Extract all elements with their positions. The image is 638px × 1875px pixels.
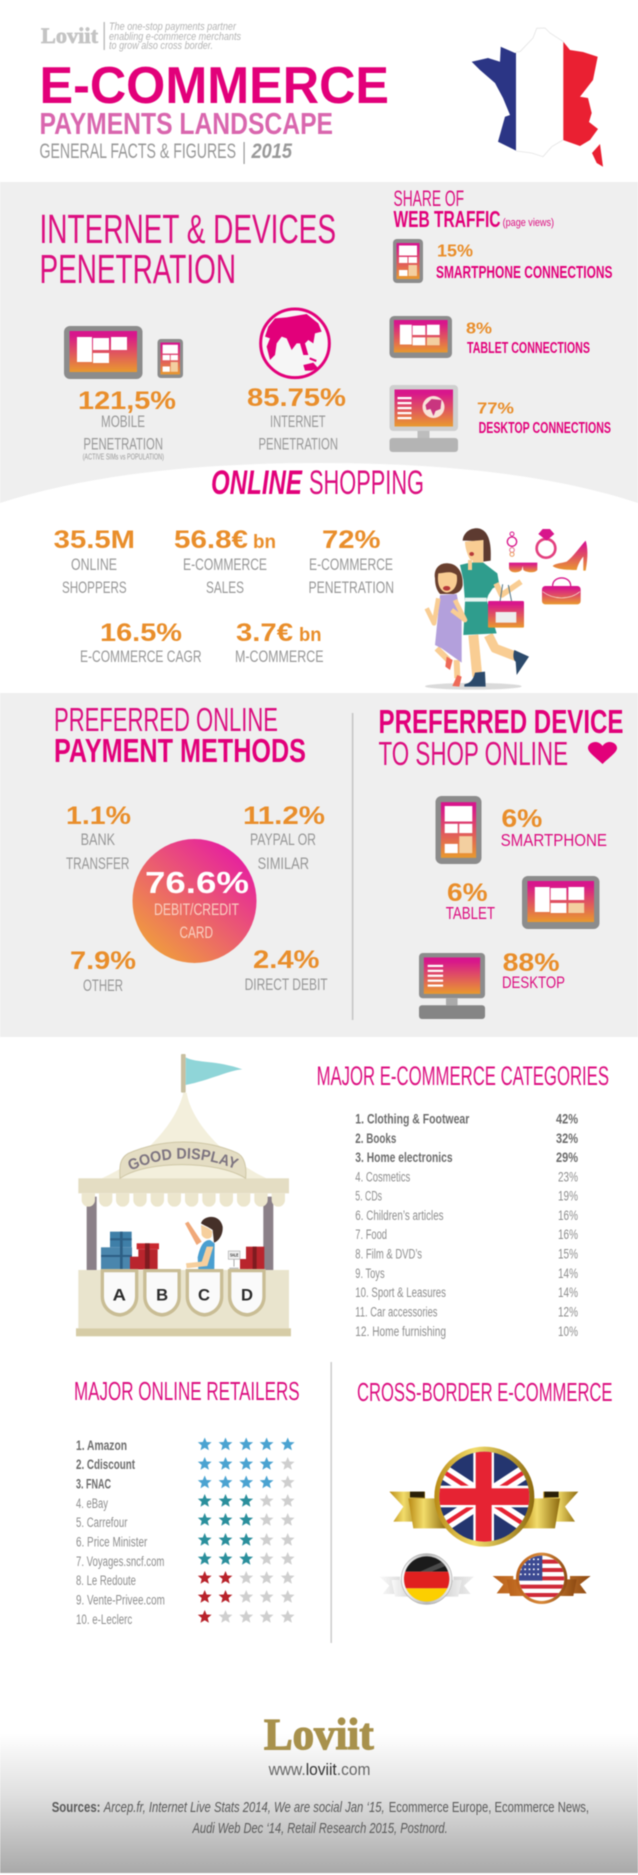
sale sign [228,1251,240,1268]
category percentages: 23% [558,1170,578,1184]
badge: United Kingdom [389,1447,578,1547]
sources: Audi Web Dec ‘14, Retail Research 2015, Postnord. [192,1820,448,1837]
retailer names: 7. Voyages.sncf.com [76,1554,164,1569]
stat: mobile penetration: MOBILE [101,412,145,431]
category percentages: 16% [558,1227,578,1242]
retailer names: 8. Le Redoute [76,1573,136,1588]
heading: PAYMENT METHODS [54,732,306,769]
stat: internet penetration: 85.75% [247,384,346,412]
panel: payment methods and preferred device background [0,693,638,1037]
panel: internet and devices penetration [40,186,612,462]
retailer names: 2. Cdiscount [76,1457,135,1472]
stat: internet penetration: INTERNET [270,412,326,431]
posts [87,1197,273,1271]
category names: 6. Children’s articles [355,1208,444,1223]
stat: mobile penetration: (ACTIVE SIMs vs POPULATION) [83,452,164,462]
category percentages: 29% [556,1150,578,1165]
panel: online shopping [54,464,587,690]
panel: online shopping background [0,463,638,693]
panel: cross-border e-commerce [357,1377,612,1604]
icon: smartphone connections [393,239,423,283]
scallops [82,1193,285,1207]
category names: 8. Film & DVD’s [355,1246,422,1262]
retailer names: 1. Amazon [76,1438,127,1453]
subheading with year: 2015 [251,140,292,163]
stat: paypal or similar: 11.2% [243,802,325,830]
heading [40,206,336,292]
stat: desktop connections: 77% [477,400,514,418]
stat: debit/credit card circle: 76.6% [145,865,249,900]
stat: paypal or similar: PAYPAL OR [250,830,316,849]
tent roof [102,1093,267,1178]
category percentages: 10% [558,1324,578,1339]
stat: desktop [502,949,565,992]
stat: smartphone: SMARTPHONE [501,830,607,850]
heading: INTERNET & DEVICES [40,206,336,252]
shields with letters: C [198,1286,210,1305]
icon: heart [588,742,617,764]
stat: e-commerce CAGR [80,619,202,666]
stat: e-commerce CAGR: E-COMMERCE CAGR [80,647,202,666]
category names: 11. Car accessories [355,1304,438,1320]
star ratings [198,1438,295,1623]
icon: watch [507,532,517,556]
category names: 1. Clothing & Footwear [355,1112,470,1126]
sign: good display: GOOD DISPLAY [128,1148,240,1170]
stat: online shoppers: SHOPPERS [62,578,127,597]
icon: tablet connections [390,316,452,358]
icon: handbag [542,578,581,604]
heading: PENETRATION [40,246,236,292]
retailer names: 6. Price Minister [76,1534,148,1550]
icon: ring [537,529,555,558]
grey band background [0,182,638,512]
stat: paypal or similar: SIMILAR [258,854,309,873]
stat: direct debit: DIRECT DEBIT [245,975,328,994]
stat: e-commerce penetration: 72% [322,526,380,554]
icon: desktop connections [390,385,458,452]
stat: direct debit [245,946,328,994]
icon: high heel shoe [553,541,587,571]
heading [211,464,424,502]
heading [378,703,624,772]
icon: desktop [419,953,485,1019]
logo: Loviit small: Loviit [41,23,99,48]
panel: preferred online payment methods [54,701,328,995]
panel: footer [52,1710,589,1837]
stat: e-commerce sales [174,526,276,597]
shields with letters: D [241,1286,253,1305]
logo: Loviit: Loviit [264,1710,374,1759]
category names: 7. Food [355,1227,387,1242]
stat: mobile penetration: 121,5% [78,387,176,415]
tagline: to grow also cross border. [109,40,213,52]
divider between payment and device [352,713,353,1020]
category names: 5. CDs [355,1188,382,1204]
stat: m-commerce: 3.7€ [236,619,293,647]
retailer names [76,1438,165,1627]
category percentages: 16% [558,1208,578,1223]
stat: smartphone connections: 15% [437,240,473,260]
category percentages: 32% [556,1131,578,1146]
stat: debit/credit card circle: DEBIT/CREDIT [154,900,239,919]
badge: Germany [379,1554,474,1604]
counter base [76,1328,291,1336]
category names: 9. Toys [355,1266,385,1281]
stat: online shoppers [54,526,135,597]
stat: direct debit: 2.4% [253,946,320,974]
category names [355,1112,470,1339]
stat: e-commerce sales: E-COMMERCE [183,555,267,574]
category percentages: 14% [558,1285,578,1300]
stat: other: OTHER [83,976,123,995]
sale sign: SALE [230,1253,238,1258]
sign: good display [118,1141,247,1179]
stat: debit/credit card circle [132,839,256,963]
stat: internet penetration [247,384,346,454]
panel: major e-commerce categories [317,1061,609,1339]
stat: smartphone: 6% [501,805,542,833]
stat: e-commerce penetration [308,526,394,597]
icon: tablet [522,876,599,929]
stat: tablet connections: 8% [466,320,492,338]
stat: tablet connections [466,320,590,357]
stat: e-commerce CAGR: 16.5% [100,619,182,647]
stat: smartphone connections [436,240,612,282]
retailer names: 4. eBay [76,1496,108,1511]
icon: tablet [64,326,142,379]
illustration: market stall [76,1054,292,1337]
category names: 3. Home electronics [355,1150,453,1165]
stat: bank transfer: BANK [81,830,115,849]
roof bar [78,1178,289,1193]
badge: United States [493,1553,591,1604]
heading: share of web traffic: SHARE OF [394,186,464,211]
sources [52,1799,589,1837]
stat: m-commerce: bn [299,625,322,646]
stat: other: 7.9% [70,947,136,975]
stat: e-commerce sales: 56.8€ [174,526,248,554]
subtitle: PAYMENTS LANDSCAPE [40,106,333,141]
heading: ONLINE [211,464,303,502]
panel: preferred device to shop online [378,703,624,1019]
stat: other [70,947,136,995]
stat: e-commerce penetration: PENETRATION [308,578,394,597]
icon: phone [158,339,183,378]
heading: share of web traffic: (page views) [503,217,554,229]
stat: m-commerce: M-COMMERCE [235,647,324,666]
blue gift boxes [101,1232,132,1269]
category percentages [556,1112,578,1339]
subheading with year: GENERAL FACTS & FIGURES [40,140,236,163]
category names: 12. Home furnishing [355,1324,446,1339]
stat: tablet: 6% [447,879,488,907]
tagline: enabling e-commerce merchants [109,31,241,43]
badges [379,1447,591,1604]
shields with letters: B [156,1286,168,1305]
heading: MAJOR ONLINE RETAILERS [74,1376,300,1406]
stat: debit/credit card circle: CARD [180,923,213,942]
category percentages: 14% [558,1266,578,1281]
tagline: The one-stop payments partner [109,21,237,33]
icon: sunglasses [509,563,537,572]
stat: tablet: TABLET [446,903,495,923]
flag [181,1054,242,1093]
stat: e-commerce penetration: E-COMMERCE [309,555,393,574]
shields with letters: A [113,1286,126,1305]
stat: e-commerce sales: bn [253,532,276,553]
stat: online shoppers: 35.5M [54,526,135,554]
category percentages: 42% [556,1112,578,1126]
stat: tablet [446,879,495,923]
category names: 4. Cosmetics [355,1170,410,1184]
sources: Arcep.fr, Internet Live Stats 2014, We are social Jan ‘15, [103,1799,385,1816]
sources: Sources: [52,1799,100,1816]
stat: mobile penetration [78,387,176,462]
heading: SHOPPING [309,464,424,502]
retailer names: 5. Carrefour [76,1515,128,1530]
stat: online shoppers: ONLINE [71,555,117,574]
stat: m-commerce [235,619,324,666]
footer gradient background [0,1733,638,1873]
shopkeeper [185,1217,223,1269]
red gift boxes [130,1243,264,1269]
retailer names: 3. FNAC [76,1476,111,1492]
counter [78,1270,289,1328]
shields with letters [101,1269,266,1317]
heading [54,701,306,769]
category names: 10. Sport & Leasures [355,1285,446,1300]
stat: mobile penetration: PENETRATION [83,434,163,454]
panel: header [40,20,608,175]
stat: bank transfer: TRANSFER [66,854,129,873]
heading: PREFERRED ONLINE [54,701,278,738]
icon: map of France in flag colours [471,28,604,168]
stat: paypal or similar [243,802,325,873]
illustration: mother and daughter shopping [425,528,587,690]
stat: smartphone [501,805,607,850]
category percentages: 12% [558,1304,578,1320]
stat: desktop: 88% [503,949,560,977]
icon: smartphone [436,796,481,864]
stat: desktop: DESKTOP [502,973,565,992]
stat: internet penetration: PENETRATION [258,434,338,454]
website: www.loviit.com [268,1760,370,1779]
tagline [109,21,241,52]
icon: globe [261,309,329,378]
stat: e-commerce sales: SALES [206,578,244,597]
panel: major online retailers [74,1376,300,1627]
heading: share of web traffic: WEB TRAFFIC [394,206,500,232]
divider between retailers and cross-border [330,1362,332,1643]
category percentages: 19% [558,1188,578,1204]
stat: desktop connections [477,400,611,437]
title: E-COMMERCE [40,57,389,115]
heading: share of web traffic [394,186,554,232]
category names: 2. Books [355,1131,396,1146]
category percentages: 15% [558,1246,578,1262]
stat: bank transfer: 1.1% [66,802,131,830]
stat: bank transfer [66,802,131,873]
retailer names: 10. e-Leclerc [76,1612,132,1627]
retailer names: 9. Vente-Privee.com [76,1592,165,1608]
